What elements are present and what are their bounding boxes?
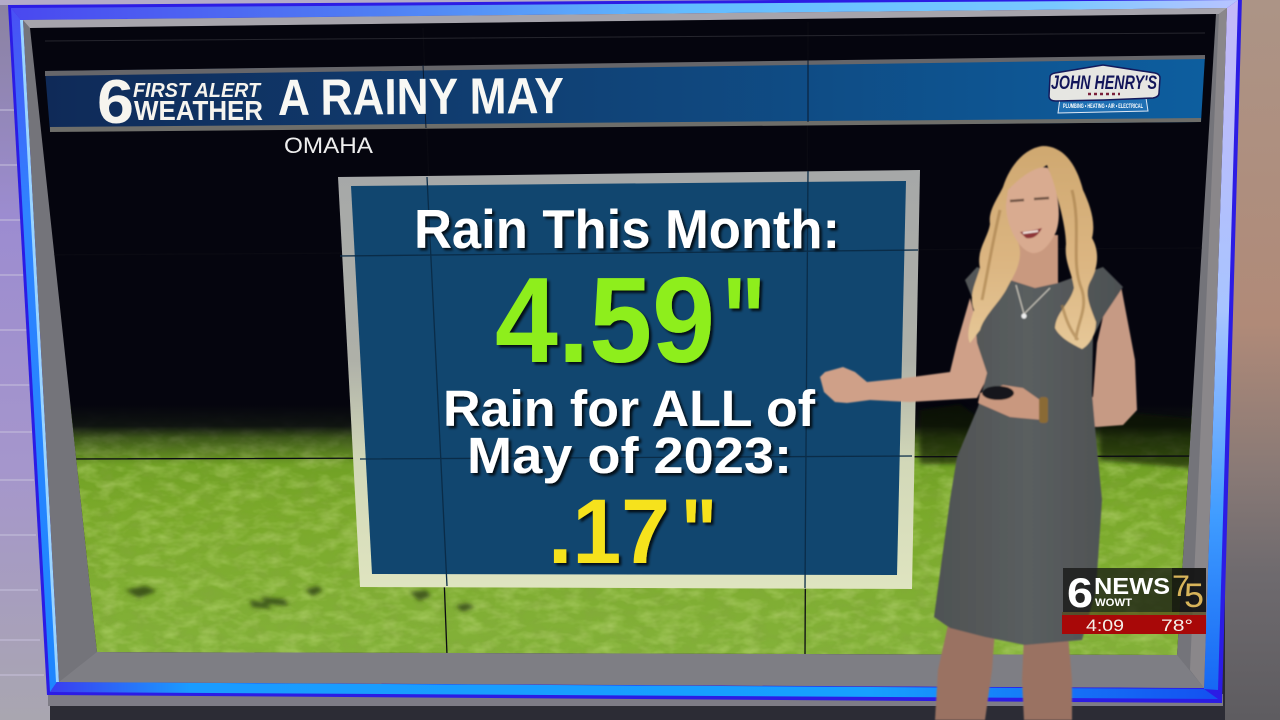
sponsor logo: John Henry's bbox=[1049, 65, 1160, 113]
title bar bbox=[45, 55, 1205, 137]
stat label: rain this month: Rain This Month: bbox=[414, 198, 840, 260]
presenter bbox=[820, 146, 1137, 720]
left light strip bbox=[11, 8, 57, 692]
panel fill bbox=[351, 181, 906, 575]
grass photo bbox=[60, 404, 1220, 665]
legs bbox=[935, 625, 995, 720]
station logo: WOWT bbox=[1095, 597, 1132, 609]
dress bbox=[934, 267, 1123, 645]
location label: OMAHA bbox=[284, 133, 373, 158]
right light strip bbox=[1204, 0, 1238, 690]
75th anniversary mark: 5 bbox=[1184, 577, 1204, 615]
stat value: .17 inches: .17 bbox=[548, 481, 670, 583]
station bug: 78° bbox=[1161, 616, 1193, 635]
stat label: rain for all of May 2023 bbox=[443, 380, 816, 484]
station bug bbox=[1062, 568, 1206, 635]
panel: rainfall stats bbox=[338, 170, 920, 589]
time and temperature strip bbox=[1062, 615, 1206, 634]
station logo: NEWS bbox=[1094, 573, 1170, 599]
video wall seams bbox=[54, 248, 1202, 654]
stat label: rain for all of May 2023: Rain for ALL of bbox=[443, 380, 816, 437]
heading: A RAINY MAY bbox=[278, 67, 564, 126]
stat value: .17 inches: " bbox=[681, 481, 717, 583]
hair bbox=[968, 146, 1097, 349]
stat label: rain for all of May 2023: May of 2023: bbox=[467, 427, 792, 484]
station bug: 4:09 bbox=[1086, 616, 1124, 635]
far arm bbox=[1050, 286, 1137, 427]
neck and chest bbox=[1010, 235, 1058, 288]
sponsor logo: John Henry's: JOHN HENRY'S bbox=[1051, 73, 1157, 94]
station logo bbox=[1067, 569, 1170, 616]
hand holding clicker bbox=[978, 385, 1043, 420]
logo: 6 First Alert Weather bbox=[97, 68, 263, 137]
logo: 6 First Alert Weather: 6 bbox=[97, 68, 134, 137]
clicker bbox=[982, 386, 1014, 400]
panel frame bbox=[338, 170, 920, 589]
watch bbox=[1039, 397, 1048, 423]
necklace bbox=[1016, 285, 1050, 314]
logo: 6 First Alert Weather: WEATHER bbox=[134, 95, 263, 126]
face bbox=[1006, 167, 1059, 253]
75th anniversary mark: 7 bbox=[1172, 570, 1190, 603]
top light strip bbox=[11, 0, 1238, 20]
pointing arm and hand bbox=[820, 298, 990, 403]
bottom light strip bbox=[50, 682, 1218, 699]
75th anniversary mark bbox=[1172, 570, 1204, 615]
station logo: 6 bbox=[1067, 569, 1093, 616]
stat value: 4.59 inches: " bbox=[722, 252, 766, 388]
stat value: 4.59 inches: 4.59 bbox=[495, 252, 715, 388]
sponsor logo: John Henry's: PLUMBING • HEATING • AIR • ELECTRICAL bbox=[1063, 103, 1143, 110]
logo: 6 First Alert Weather: FIRST ALERT bbox=[133, 80, 262, 102]
